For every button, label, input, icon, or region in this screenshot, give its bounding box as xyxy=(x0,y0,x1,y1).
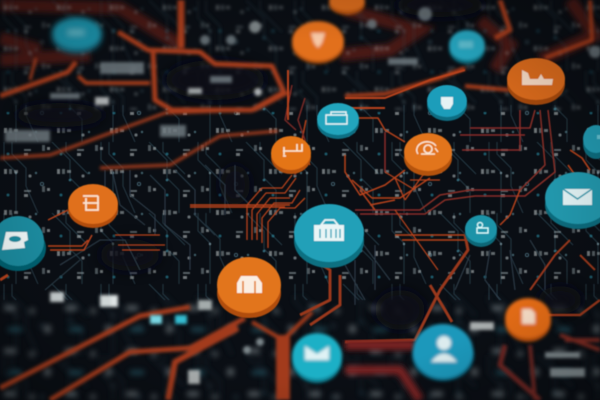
fine trace texture: sharp middle band xyxy=(0,105,600,300)
node: teal left edge xyxy=(0,216,46,271)
node: orange upper right large xyxy=(507,58,565,105)
fine trace texture: top blurred band xyxy=(0,0,600,112)
mid-field grey circuit traces xyxy=(45,165,545,305)
node: blurred teal mail bottom xyxy=(292,333,342,383)
node: blurred teal person bottom xyxy=(412,324,474,381)
node: teal centre right upper xyxy=(427,85,467,121)
top blurred orange traces xyxy=(0,0,592,168)
node: teal mail right xyxy=(545,172,600,229)
bright lower chips xyxy=(50,292,585,384)
fine trace texture: bottom blurred band xyxy=(0,295,600,400)
far blurred dark red haze top xyxy=(0,0,595,70)
bottom blurred orange and red traces xyxy=(0,307,600,400)
small component texture: middle band xyxy=(0,112,600,292)
large blurred component texture: bottom band xyxy=(0,300,600,400)
node: teal right edge xyxy=(583,125,600,159)
node: orange centre left xyxy=(271,136,311,174)
node: teal upper right small xyxy=(449,30,485,64)
node: orange centre right xyxy=(404,133,452,176)
upper blurred component chips xyxy=(5,7,600,142)
node: orange large lower centre xyxy=(217,257,281,318)
node: teal large centre xyxy=(294,204,364,268)
thick lower orange traces xyxy=(300,235,600,342)
small component texture: top band xyxy=(0,0,600,112)
node: teal small right mid xyxy=(465,215,497,247)
node: orange top centre xyxy=(292,21,344,64)
node: blurred teal top left xyxy=(52,17,102,54)
node: orange left xyxy=(68,184,118,228)
node: blurred orange top xyxy=(329,0,365,15)
node: teal centre upper xyxy=(317,103,359,139)
dark empty board areas xyxy=(15,0,582,330)
sharp central orange traces xyxy=(0,70,590,280)
node: orange lower right xyxy=(505,298,551,342)
